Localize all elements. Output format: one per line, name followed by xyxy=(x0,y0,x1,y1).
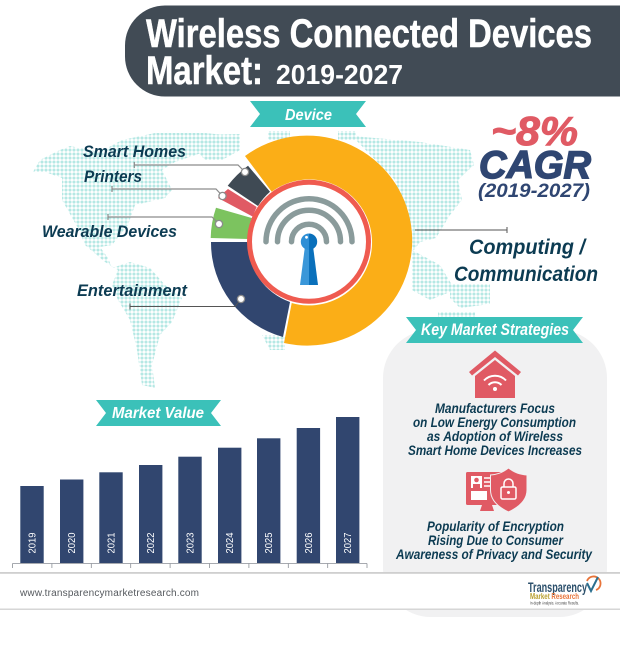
icon: smart home wifi xyxy=(469,350,521,398)
segment: smart homes xyxy=(228,166,270,206)
website url: www.transparencymarketresearch.com xyxy=(19,588,199,599)
CAGR callout xyxy=(478,108,591,202)
strategy 1 text: Manufacturers Focus xyxy=(435,400,555,416)
label: Computing / Communication with leader xyxy=(415,227,598,286)
year labels: 2021 xyxy=(106,532,118,554)
ribbon: Key Market Strategies: Key Market Strategies xyxy=(421,321,569,339)
label: Computing / Communication with leader: Communication xyxy=(454,263,598,286)
label: Smart Homes with leader xyxy=(83,142,249,176)
logo: Transparency Market Research: Transparency xyxy=(528,580,587,595)
label: Smart Homes with leader: Smart Homes xyxy=(83,142,186,161)
bar chart: market value by year xyxy=(12,417,367,568)
year labels xyxy=(28,532,354,554)
label: Entertainment with leader xyxy=(77,281,245,310)
ribbon: Market Value: Market Value xyxy=(112,405,204,422)
segment: entertainment xyxy=(211,242,290,337)
segment: computing / communication xyxy=(245,136,412,346)
strategy 2 text: Rising Due to Consumer xyxy=(428,532,564,548)
strategy 1 text: as Adoption of Wireless xyxy=(427,428,563,444)
label: Wearable Devices with leader: Wearable Devices xyxy=(42,222,177,241)
logo: Transparency Market Research: Market Research xyxy=(530,592,579,601)
year labels: 2022 xyxy=(146,532,157,554)
logo: Transparency Market Research xyxy=(528,576,601,606)
period: (2019-2027) xyxy=(478,181,590,202)
footer strip xyxy=(0,572,620,610)
strategy 2 text: Popularity of Encryption xyxy=(427,518,564,534)
year labels: 2023 xyxy=(186,532,196,554)
strategy 1 text xyxy=(408,400,582,458)
ribbon: Market Value xyxy=(96,400,221,426)
value: ~8%: ~8% xyxy=(491,108,578,154)
logo: Transparency Market Research: In-depth Analysis. Accurate Results. xyxy=(530,600,579,606)
label: Printers with leader: Printers xyxy=(84,167,142,186)
segment: printers xyxy=(218,189,257,217)
bars xyxy=(20,417,359,563)
donut chart: device share xyxy=(211,136,412,346)
title years: 2019-2027 xyxy=(276,59,403,90)
year labels: 2024 xyxy=(225,532,236,554)
segment: wearable devices xyxy=(211,208,252,239)
title banner xyxy=(125,6,620,97)
icon: wireless tower xyxy=(266,199,352,285)
ribbon: Device: Device xyxy=(285,107,332,124)
ribbon: Key Market Strategies xyxy=(406,317,583,343)
label: Printers with leader xyxy=(84,167,226,200)
year labels: 2026 xyxy=(304,532,315,554)
year labels: 2019 xyxy=(28,532,38,554)
year labels: 2027 xyxy=(343,532,354,554)
center ring xyxy=(250,182,368,301)
label: Wearable Devices with leader xyxy=(42,214,223,241)
ribbon: Device xyxy=(250,101,366,127)
title text line 2: Market: xyxy=(146,49,263,93)
strategy 1 text: on Low Energy Consumption xyxy=(413,414,576,430)
label: Entertainment with leader: Entertainment xyxy=(77,281,188,300)
dotted world map background xyxy=(33,131,490,388)
strategy 1 text: Smart Home Devices Increases xyxy=(408,442,582,458)
label: Computing / Communication with leader: Computing / xyxy=(469,236,587,259)
CAGR heading: CAGR xyxy=(479,144,591,187)
year labels: 2020 xyxy=(67,532,78,554)
strategy 2 text xyxy=(395,518,593,562)
year labels: 2025 xyxy=(264,532,275,554)
panel: key market strategies xyxy=(383,317,607,617)
icon: monitor with security shield xyxy=(466,468,527,512)
x axis xyxy=(12,564,367,568)
